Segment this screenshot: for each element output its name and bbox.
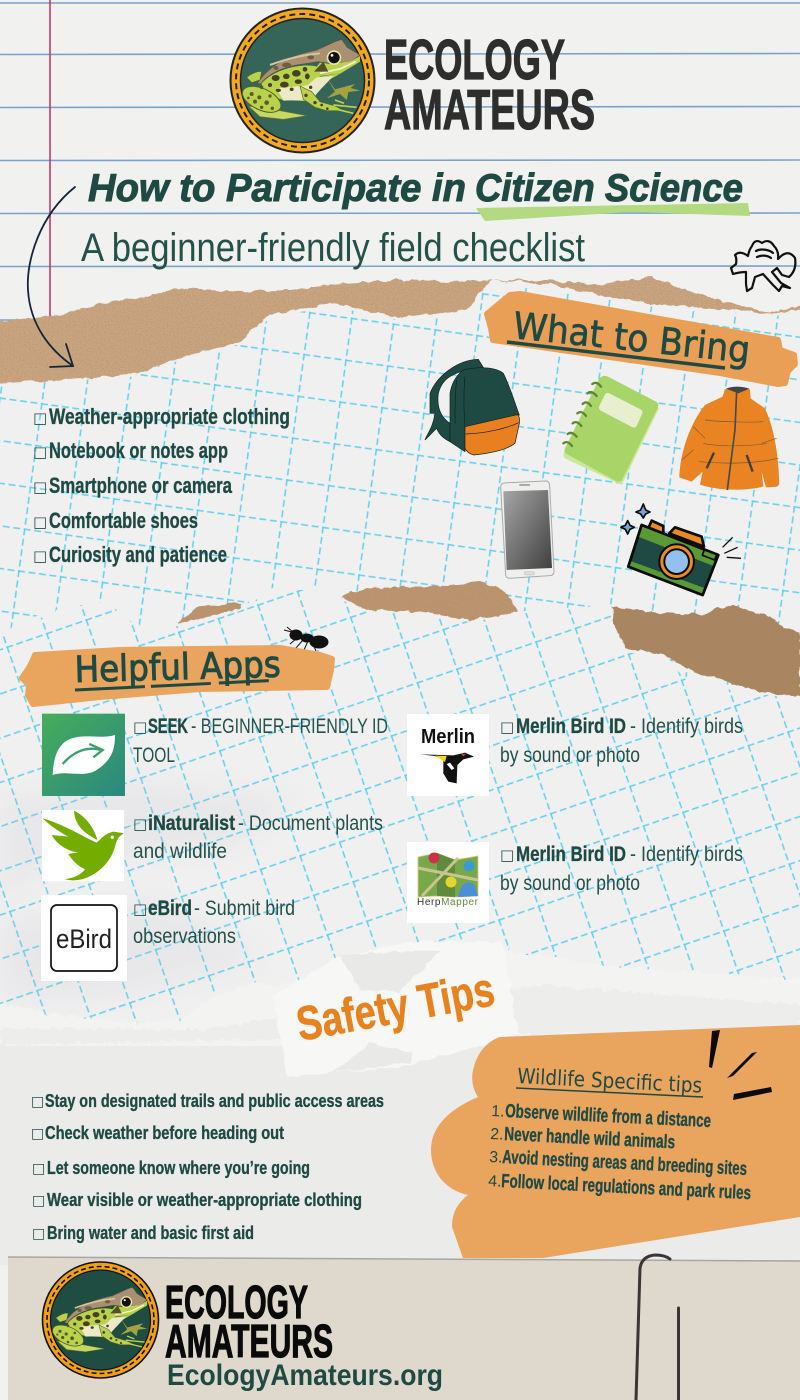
icon: ant <box>284 627 328 653</box>
text: iNaturalist: iNaturalist <box>148 812 235 835</box>
text: Seek: - BEGINNER-FRIENDLY ID <box>191 715 388 738</box>
checklist: what to bring: □ <box>33 409 47 427</box>
numbered list: wildlife tips: Never handle wild animals <box>504 1124 676 1153</box>
checklist: what to bring: □ <box>33 547 47 565</box>
text: HerpMapper row: - Identify birds <box>630 843 743 866</box>
text: Seek: TOOL <box>133 744 175 767</box>
logo: Ecology Amateurs <box>230 8 595 152</box>
icon: camera with sparkles <box>621 504 741 595</box>
icon: outlined frog doodle <box>731 241 795 291</box>
checklist: safety tips: Stay on designated trails and public access areas <box>45 1090 384 1111</box>
checklist: safety tips <box>31 1090 384 1243</box>
checklist: what to bring: □ <box>33 513 47 531</box>
text: eBird: □ <box>133 900 147 918</box>
text: Merlin: - Identify birds <box>630 715 743 738</box>
text: Seek: SEEK <box>148 715 188 738</box>
app logo: Merlin: Merlin <box>421 726 475 748</box>
text: eBird: eBird <box>148 897 192 920</box>
panel: Safety Tips label <box>273 942 518 1077</box>
checklist: safety tips: □ <box>32 1193 45 1209</box>
icon: paperclip <box>636 1255 678 1400</box>
text: Seek <box>133 715 388 767</box>
logo: Ecology Amateurs: AMATEURS <box>384 78 595 142</box>
upper grid paper <box>0 280 800 700</box>
arrow: curved down to the checklist <box>28 187 75 367</box>
app logo: Seek <box>42 714 125 796</box>
checklist: safety tips: Bring water and basic first aid <box>47 1222 254 1243</box>
numbered list: wildlife tips: 3. <box>489 1149 503 1167</box>
text: Seek: □ <box>133 718 147 736</box>
checklist: what to bring: Comfortable shoes <box>49 508 198 533</box>
badge: frog medallion <box>230 8 374 152</box>
icon: smartphone <box>501 481 554 578</box>
logo: Ecology Amateurs: ECOLOGY <box>384 28 565 92</box>
checklist: what to bring: □ <box>33 478 47 496</box>
panel: footer: AMATEURS <box>165 1315 333 1367</box>
checklist: what to bring: Notebook or notes app <box>49 438 228 463</box>
text: HerpMapper row: □ <box>500 846 514 864</box>
checklist: what to bring: Smartphone or camera <box>49 473 233 498</box>
text: iNaturalist: □ <box>133 815 147 833</box>
checklist: what to bring: Weather-appropriate clothing <box>49 404 290 429</box>
text: iNaturalist: - Document plants <box>238 812 383 835</box>
checklist: what to bring <box>33 404 290 567</box>
title <box>88 167 743 210</box>
app logo: iNaturalist <box>42 810 124 881</box>
numbered list: wildlife tips: Observe wildlife from a distance <box>505 1101 712 1132</box>
text: HerpMapper row <box>500 843 743 895</box>
checklist: safety tips: □ <box>31 1094 44 1110</box>
panel: footer <box>8 1255 800 1400</box>
icon: orange jacket <box>679 387 779 490</box>
accent: black burst strokes <box>709 1030 772 1100</box>
text: Merlin: □ <box>500 718 514 736</box>
panel: footer: ECOLOGY <box>165 1276 308 1328</box>
highlighter stroke under Citizen Science <box>476 203 750 221</box>
app logo: eBird: eBird <box>56 924 112 954</box>
text: Merlin <box>500 715 743 767</box>
text: HerpMapper row: Merlin Bird ID <box>516 843 626 866</box>
banner: Helpful Apps <box>22 645 332 704</box>
app logo: eBird <box>41 895 127 981</box>
text: eBird <box>133 897 295 948</box>
checklist: safety tips: Wear visible or weather-appropriate clothing <box>47 1189 362 1210</box>
title: How to Participate in <box>88 167 466 210</box>
checklist: safety tips: □ <box>32 1226 45 1242</box>
checklist: safety tips: Let someone know where you’re going <box>47 1157 310 1178</box>
text: eBird: observations <box>133 925 236 948</box>
checklist: safety tips: □ <box>31 1126 44 1142</box>
app logo: Merlin <box>407 714 489 796</box>
text: iNaturalist: and wildlife <box>133 840 227 863</box>
heading: Wildlife Specific tips: Wildlife Specific tips <box>517 1064 703 1098</box>
app logo: HerpMapper: HerpMapper <box>417 897 479 908</box>
text: HerpMapper row: by sound or photo <box>500 872 640 895</box>
lower grid paper with crumples <box>0 587 800 1060</box>
panel: Safety Tips label: Safety Tips <box>292 963 499 1052</box>
numbered list: wildlife tips: 4. <box>488 1173 502 1191</box>
banner: Helpful Apps: Helpful Apps <box>74 645 281 691</box>
text: Merlin: by sound or photo <box>500 744 640 767</box>
banner: What to Bring <box>487 294 795 384</box>
fuzzy torn white edge and plain lower sheet <box>0 950 800 1265</box>
checklist: what to bring: Curiosity and patience <box>49 542 227 567</box>
banner: What to Bring: What to Bring <box>511 304 752 372</box>
icon: backpack <box>425 359 520 455</box>
numbered list: wildlife tips: 2. <box>490 1126 504 1144</box>
subtitle: A beginner-friendly field checklist <box>81 226 585 270</box>
icon: green notebook <box>563 376 659 485</box>
panel: Wildlife Specific tips <box>431 1025 800 1258</box>
checklist: safety tips: Check weather before heading out <box>45 1122 284 1143</box>
numbered list: wildlife tips <box>488 1101 751 1204</box>
app logo: HerpMapper <box>407 842 489 923</box>
numbered list: wildlife tips: 1. <box>491 1103 505 1121</box>
text: iNaturalist <box>133 812 383 863</box>
checklist: safety tips: □ <box>32 1161 45 1177</box>
panel: footer: EcologyAmateurs.org <box>167 1359 443 1392</box>
badge: footer frog medallion <box>42 1262 158 1378</box>
text: eBird: - Submit bird <box>194 897 295 920</box>
text: Merlin: Merlin Bird ID <box>516 715 626 738</box>
torn kraft scraps between sheets <box>178 582 800 700</box>
torn kraft paper band <box>0 277 800 440</box>
checklist: what to bring: □ <box>33 443 47 461</box>
title: Citizen Science <box>475 167 743 210</box>
